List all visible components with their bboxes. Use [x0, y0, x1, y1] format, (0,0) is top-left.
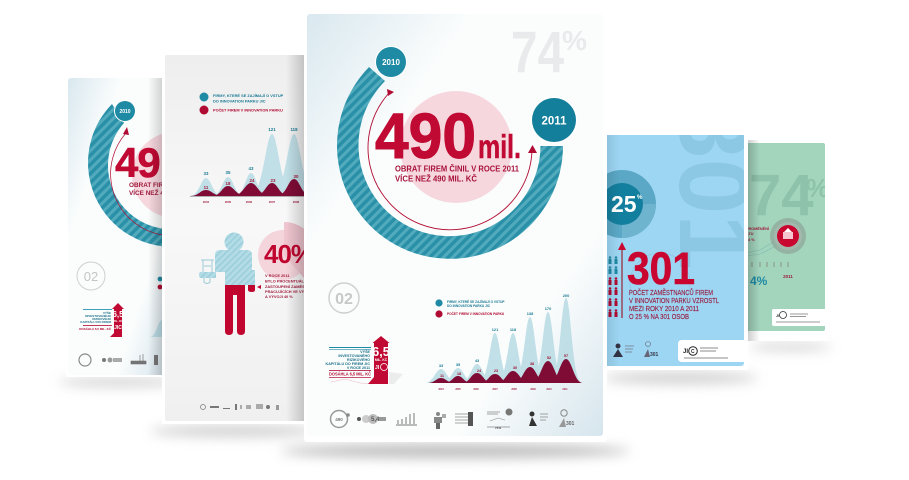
area chart: 2007 — [269, 200, 276, 204]
area chart: 2004 — [203, 200, 210, 204]
investment text: VÝŠE — [103, 310, 111, 315]
thumb: dark person — [529, 412, 548, 426]
area chart: 30 — [294, 174, 299, 179]
description: V ROCE 2011 — [265, 273, 290, 278]
red arc — [110, 127, 162, 236]
caption: VÍCE NEŽ 490 MIL. KČ — [395, 172, 477, 184]
pink circle — [400, 91, 512, 203]
red arc with arrows — [368, 89, 537, 230]
poster: main 490 mil — [304, 11, 607, 442]
490 headline: 490 — [375, 100, 476, 172]
icon: lab flask — [201, 260, 214, 284]
thumb: line chart: 74% — [495, 426, 501, 430]
striped ring — [337, 67, 563, 259]
shadow — [286, 55, 306, 421]
description — [265, 274, 304, 298]
thumb: bar chart — [396, 413, 417, 425]
02 badge — [329, 283, 359, 313]
red arrow: JIC — [114, 325, 122, 331]
area chart: 11 — [204, 185, 209, 190]
big 74 percent: 74 — [749, 163, 814, 228]
area chart: 2006 — [246, 200, 253, 204]
small thumbnails — [613, 342, 659, 358]
floor shadows — [58, 343, 832, 458]
40 percent circle — [258, 222, 304, 280]
investment text — [79, 309, 112, 331]
legend — [200, 92, 284, 114]
mini line chart — [748, 242, 775, 256]
thumbnails — [200, 404, 279, 410]
red arrow: 6,5 — [372, 345, 390, 359]
description: PRACUJÍCÍCH VE VÝZKUMU — [265, 289, 318, 294]
area chart: 18 — [226, 181, 231, 186]
caption: OBRAT FIREM ČINIL V ROCE 2011 — [395, 162, 519, 174]
investment text: INVESTOVANÉHO — [85, 313, 112, 318]
caption — [129, 182, 162, 195]
area chart: 2007 — [492, 388, 498, 391]
small thumbnails: 301 — [650, 352, 659, 358]
area chart: 2005 — [455, 388, 461, 391]
up arrow — [618, 242, 626, 318]
caption: VÍCE NEŽ 490 — [129, 188, 171, 197]
description: POČET ZAMĚSTNANCŮ FIREM — [629, 288, 713, 297]
area chart: 2006 — [473, 388, 479, 391]
legend: DO INNOVATION PARKU JIC — [447, 304, 491, 308]
area chart: 2008 — [293, 200, 300, 204]
thumb: 301: 301 — [566, 421, 575, 427]
description: MEZI ROKY 2010 A 2011 — [629, 304, 699, 313]
small red pointer — [257, 285, 261, 289]
02 badge: 02 — [84, 269, 98, 284]
poster: left 490 — [66, 78, 162, 377]
area chart: 23 — [271, 178, 276, 183]
40 percent circle: 40% — [264, 239, 314, 269]
area chart: 2008 — [511, 388, 517, 391]
green poster text — [748, 226, 770, 241]
25 percent circle — [607, 170, 656, 238]
area chart: 57 — [564, 353, 568, 358]
area chart: 23 — [494, 368, 499, 373]
2010 badge: 2010 — [382, 58, 400, 67]
investment block: KAPITÁLU DO FIREM JIC — [326, 361, 370, 366]
thumb: 490 ring: 490 — [335, 417, 343, 422]
red arrow — [368, 336, 403, 384]
JIC logo box: JI — [776, 313, 779, 318]
area chart: 43 — [475, 358, 480, 363]
area chart: 118 — [290, 127, 298, 132]
green poster text: PROMĚNĚNÍ — [746, 226, 770, 231]
area chart: 35 — [456, 362, 461, 367]
thumb: 5,4 mil — [357, 414, 386, 424]
area chart: 11 — [440, 373, 445, 378]
description: V INNOVATION PARKU VZROSTL — [629, 296, 719, 305]
concentric decor circle — [630, 253, 690, 313]
mil.: mil. — [478, 128, 521, 165]
area chart: 52 — [547, 355, 552, 360]
green poster text: ATU — [746, 232, 754, 236]
legend — [435, 299, 505, 318]
JIC logo box: JI — [683, 349, 688, 355]
area chart: 121 — [492, 327, 499, 332]
JIC logo box — [678, 340, 744, 362]
area chart: 118 — [510, 327, 517, 332]
area chart: 138 — [527, 311, 534, 316]
area chart: 170 — [545, 306, 551, 311]
area chart — [425, 293, 583, 391]
investment block — [326, 347, 372, 384]
poster thumbnails — [330, 408, 575, 430]
big 74 percent: % — [562, 25, 587, 56]
description — [629, 288, 719, 321]
caption: OBRAT FIREM — [129, 182, 173, 189]
investment text: KAPITÁLU DO FIREM — [80, 319, 111, 324]
thumb: person — [434, 412, 446, 429]
red arrow — [110, 303, 124, 337]
area chart: 200 — [563, 293, 569, 298]
investment text: RIZIKOVÉHO — [92, 316, 112, 321]
thumb: line chart — [487, 408, 512, 430]
thumbnails — [79, 354, 158, 366]
area chart: 121 — [268, 127, 276, 132]
legend: FIRMY, KTERÉ SE ZAJÍMAJÍ O VSTUP — [447, 299, 505, 304]
JIC logo box — [772, 309, 825, 326]
area chart: 18 — [457, 371, 462, 376]
2010 badge — [375, 46, 407, 78]
poster: blue 301 — [607, 135, 748, 370]
poster: second chart + person — [162, 55, 304, 424]
area chart: 35 — [226, 170, 231, 175]
partial chart — [150, 320, 162, 337]
investment block: DOSÁHLA 6,5 MIL. KČ — [329, 372, 371, 376]
year label: 2011 — [783, 274, 793, 279]
red arrow: MIL. KČ — [112, 318, 124, 323]
description: A VÝVOJI 40 % — [265, 294, 293, 299]
legend: FIRMY, KTERÉ SE ZAJÍMAJÍ O VSTUP — [213, 93, 284, 98]
thumb: arrow block — [455, 412, 473, 426]
legend dots — [158, 277, 162, 289]
area chart: 24 — [250, 178, 255, 183]
legend: POČET FIREM V INNOVATION PARKU — [213, 108, 283, 112]
investment block: INVESTOVANÉHO — [338, 353, 370, 358]
2011 badge — [530, 96, 578, 144]
description: O 25 % NA 301 OSOB — [629, 312, 689, 321]
area chart: 2004 — [438, 388, 444, 391]
poster: green 74% — [748, 140, 825, 341]
25 percent circle: % — [637, 195, 643, 201]
area chart: 2011 — [562, 388, 568, 391]
red arrow: JI — [375, 365, 380, 371]
area chart: 2010 — [546, 388, 552, 391]
25 percent circle: 25 — [611, 191, 637, 217]
thumb: 301 — [559, 410, 575, 427]
area chart: 38 — [530, 361, 535, 366]
striped ring — [88, 104, 162, 246]
area chart: 43 — [249, 166, 254, 171]
2010 badge: 2010 — [119, 109, 131, 115]
thumb: 5,4 mil: 5,4 — [371, 417, 380, 423]
area chart: 2005 — [225, 200, 232, 204]
shadow — [604, 135, 620, 366]
shadow — [746, 140, 760, 341]
green poster text: 74 % — [746, 238, 755, 242]
thumb: 490 ring — [330, 410, 350, 428]
area chart: 30 — [513, 365, 517, 370]
pink circle — [132, 134, 162, 216]
investment text: DOSÁHLA 6,5 MIL. KČ — [79, 326, 112, 331]
shadow — [148, 78, 165, 375]
description: BYLO PROCENTUÁLNÍ — [265, 278, 309, 284]
red 301: 301 — [627, 243, 695, 294]
big 74 percent: 74 — [511, 20, 564, 85]
investment block: VÝŠE — [360, 349, 371, 354]
investment block: RIZIKOVÉHO — [347, 357, 370, 362]
red arrow: 6,5 — [112, 310, 124, 319]
legend: DO INNOVATION PARKU JIC — [213, 98, 266, 104]
people rows — [608, 256, 618, 317]
teal percent: 4% — [750, 274, 768, 288]
area chart: 2009 — [530, 388, 536, 391]
investment block: V ROCE 2011 — [347, 366, 370, 370]
description: ZASTOUPENÍ ZAMĚSTNANCŮ — [265, 284, 321, 289]
2010 badge — [114, 100, 136, 122]
red arrow: MIL. KČ — [375, 357, 388, 362]
2011 badge: 2011 — [542, 116, 567, 128]
area chart: 33 — [439, 363, 444, 368]
percent sign: % — [806, 173, 829, 203]
JIC logo box: C — [691, 349, 695, 355]
mini chart ticks — [752, 262, 788, 267]
icon: red building circle — [770, 218, 806, 254]
area chart — [190, 128, 304, 203]
legend: POČET FIREM V INNOVATION PARKU — [447, 311, 505, 316]
caption — [395, 162, 519, 184]
area chart: 33 — [204, 171, 209, 176]
big rotated 301: 301 — [658, 103, 770, 270]
02 badge — [77, 262, 105, 290]
person figure — [199, 232, 255, 335]
02 badge: 02 — [335, 291, 353, 308]
49: 49 — [115, 139, 160, 186]
area chart: 24 — [477, 368, 482, 373]
